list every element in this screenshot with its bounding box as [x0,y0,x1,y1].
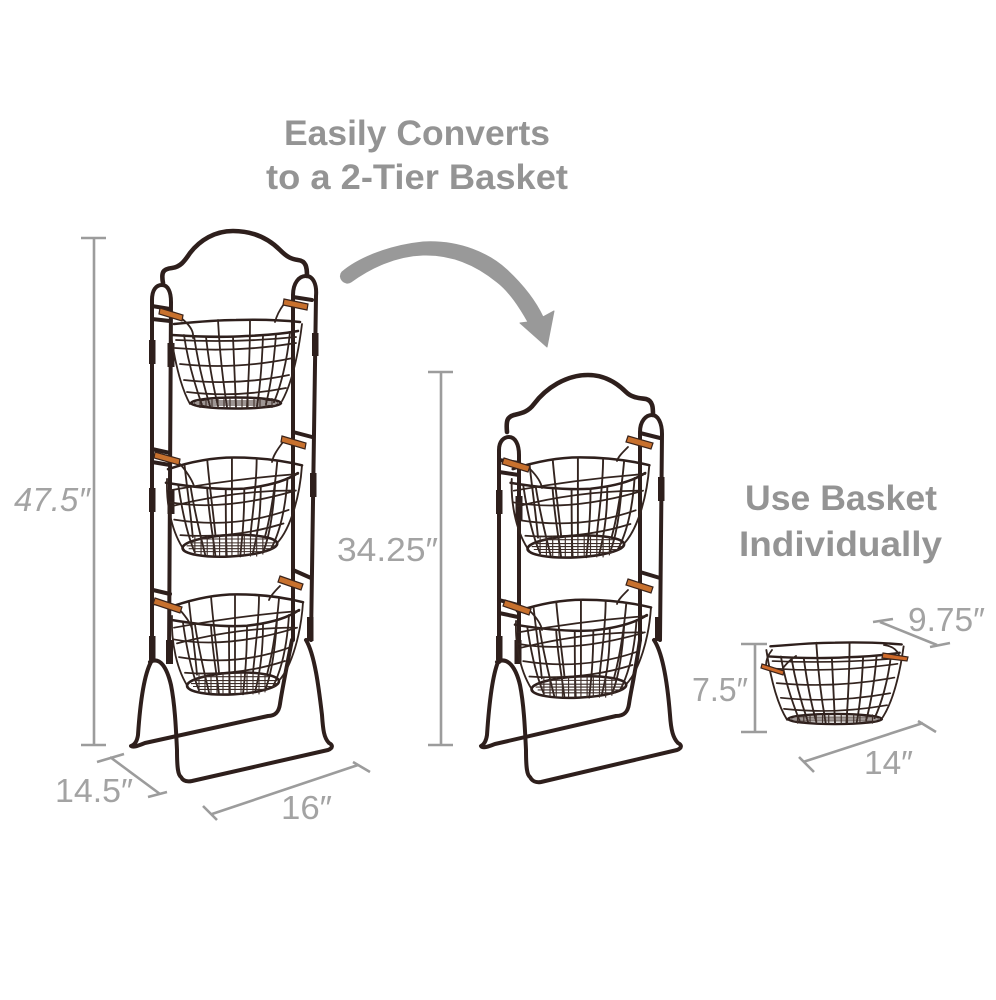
heading: easily converts: Easily Converts [284,114,550,153]
dimension: 3-tier height 47.5 [14,238,106,745]
stand frame [481,375,681,782]
3-tier stand [131,231,332,781]
dimension: basket depth 9.75: 9.75″ [908,601,985,638]
heading: use basket individually [739,479,943,564]
stand frame [131,231,332,781]
heading: use basket individually: Individually [739,525,943,564]
dimension: 2-tier height 34.25 [337,372,453,745]
heading: easily converts [266,114,568,197]
dimension: basket width 14: 14″ [864,744,913,781]
basket: middle tier [154,436,306,559]
arrow: curved conversion arrow [340,242,554,347]
basket: upper tier [502,436,653,560]
basket: lower tier [503,579,653,700]
basket: bottom tier [153,576,303,697]
dimension: width 16: 16″ [281,789,332,826]
2-tier stand [481,375,681,782]
single basket [761,642,908,724]
heading: easily converts: to a 2-Tier Basket [266,158,568,197]
dimension: basket height 7.5: 7.5″ [692,671,748,708]
dimension: basket height 7.5 [692,644,767,732]
dimension: basket width 14 [799,721,936,781]
dimension: depth 14.5: 14.5″ [55,772,133,809]
dimension: 3-tier height 47.5: 47.5″ [14,481,91,518]
dimension: basket depth 9.75 [873,601,985,647]
dimension: depth 14.5 [55,754,167,809]
basket: top tier [159,299,308,408]
handle: right wood grip [882,653,908,661]
dimension: 2-tier height 34.25: 34.25″ [337,531,438,568]
handle: left wood grip [761,664,784,675]
dimension: width 16 [203,762,370,826]
heading: use basket individually: Use Basket [745,479,937,518]
